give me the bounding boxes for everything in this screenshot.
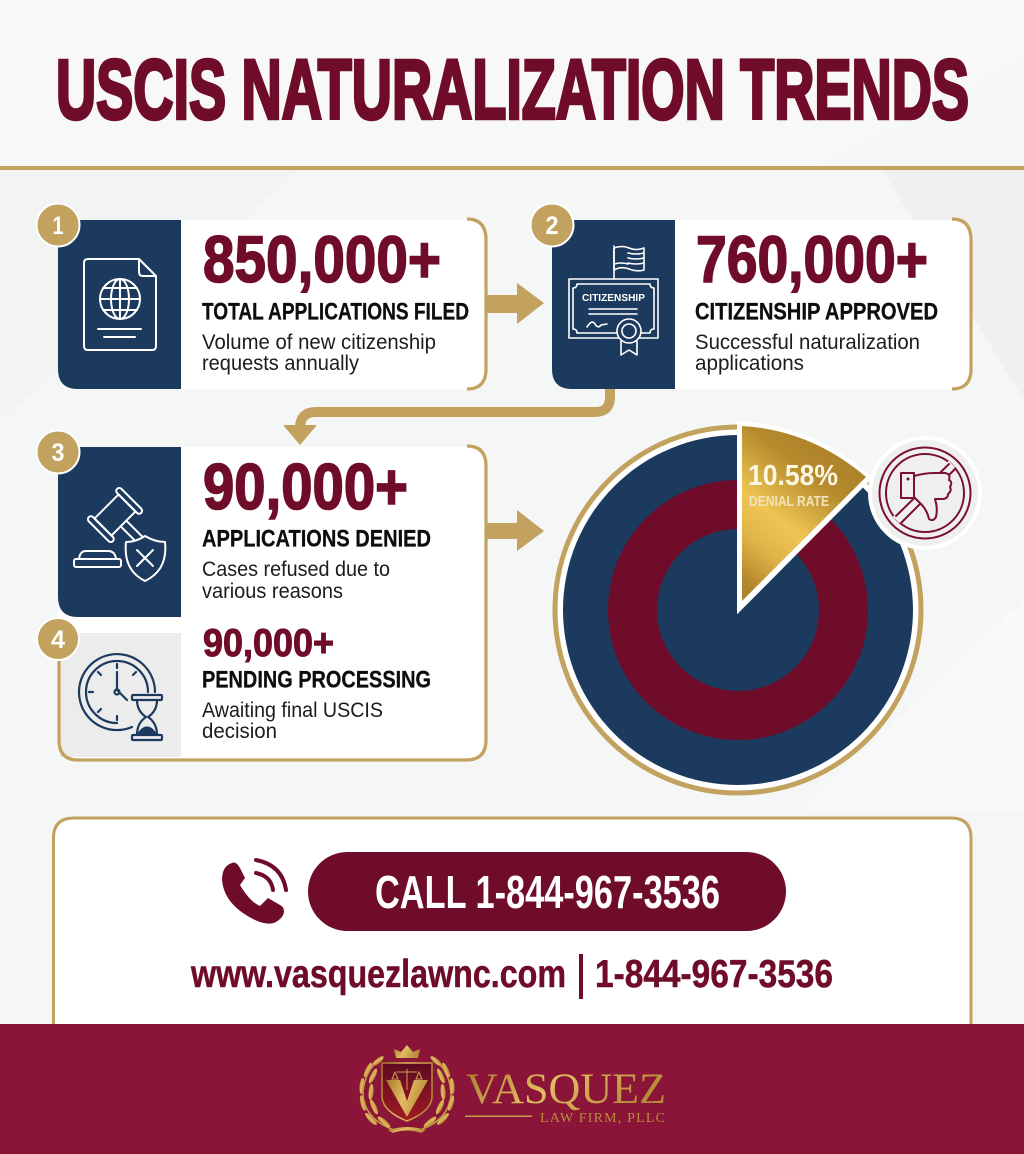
footer band [0, 1024, 1024, 1154]
panel: denied and pending [36, 430, 486, 760]
wedge: 10.58% [738, 422, 871, 612]
logo wordmark: LAW FIRM, PLLC [540, 1111, 665, 1126]
description denied: various reasons [202, 580, 343, 603]
connector arrow: card 3 to chart [487, 510, 544, 551]
description: requests annually [202, 352, 359, 375]
description: Volume of new citizenship [202, 331, 436, 354]
wedge: 10.58%: DENIAL RATE [749, 493, 829, 510]
stat: 850,000+: 850,000+ [203, 222, 441, 296]
call button [308, 852, 786, 931]
logo: Vasquez Law Firm [359, 1045, 666, 1133]
icon: thumbs down prohibited [870, 438, 980, 548]
icon: gavel and shield [74, 487, 165, 581]
website and phone line: www.vasquezlawnc.com [190, 953, 566, 996]
badge 4 [37, 618, 79, 660]
description denied [202, 558, 390, 603]
description pending: Awaiting final USCIS [202, 699, 383, 722]
wedge: 10.58%: 10.58% [748, 460, 838, 492]
logo wordmark: VASQUEZ [466, 1066, 666, 1113]
icon: crown [394, 1045, 420, 1058]
panel: citizenship approved [530, 204, 972, 389]
website and phone line: 1-844-967-3536 [595, 953, 833, 996]
badge 2 [530, 204, 574, 246]
label: CITIZENSHIP APPROVED [695, 298, 938, 326]
badge 1: 1 [52, 212, 64, 240]
icon: passport document with globe [84, 259, 156, 350]
icon: shield with V [382, 1063, 432, 1121]
icon: clock and hourglass [79, 654, 162, 740]
stat: 90,000+ denied: 90,000+ [203, 450, 408, 523]
description pending [202, 699, 383, 743]
badge 4: 4 [51, 626, 65, 654]
connector arrow: card 2 to card 3 [283, 388, 610, 445]
icon: citizenship certificate with flag [569, 246, 658, 355]
badge 3 [36, 430, 80, 474]
icon: citizenship certificate with flag: CITIZENSHIP [582, 293, 645, 304]
chart: denial rate radial [555, 422, 980, 793]
description denied: Cases refused due to [202, 558, 390, 581]
website and phone line [190, 953, 833, 999]
connector arrow: card 1 to card 2 [487, 283, 544, 324]
icon: laurel wreath [359, 1055, 455, 1133]
badge 1 [36, 204, 80, 246]
description [695, 331, 920, 375]
description [202, 331, 436, 375]
call button: CALL 1-844-967-3536 [375, 866, 720, 918]
panel: total applications filed [36, 204, 486, 389]
badge 2: 2 [546, 212, 558, 240]
description pending: decision [202, 720, 277, 743]
description: Successful naturalization [695, 331, 920, 354]
badge 3: 3 [52, 439, 64, 467]
label: TOTAL APPLICATIONS FILED [202, 298, 469, 326]
description: applications [695, 352, 804, 375]
panel: call to action [54, 818, 971, 1026]
header divider [0, 166, 1024, 170]
icon: phone [222, 860, 286, 924]
label pending: PENDING PROCESSING [202, 666, 431, 694]
label denied: APPLICATIONS DENIED [202, 526, 431, 552]
stat: 760,000+: 760,000+ [696, 222, 928, 296]
stat: 90,000+ pending: 90,000+ [203, 622, 334, 665]
